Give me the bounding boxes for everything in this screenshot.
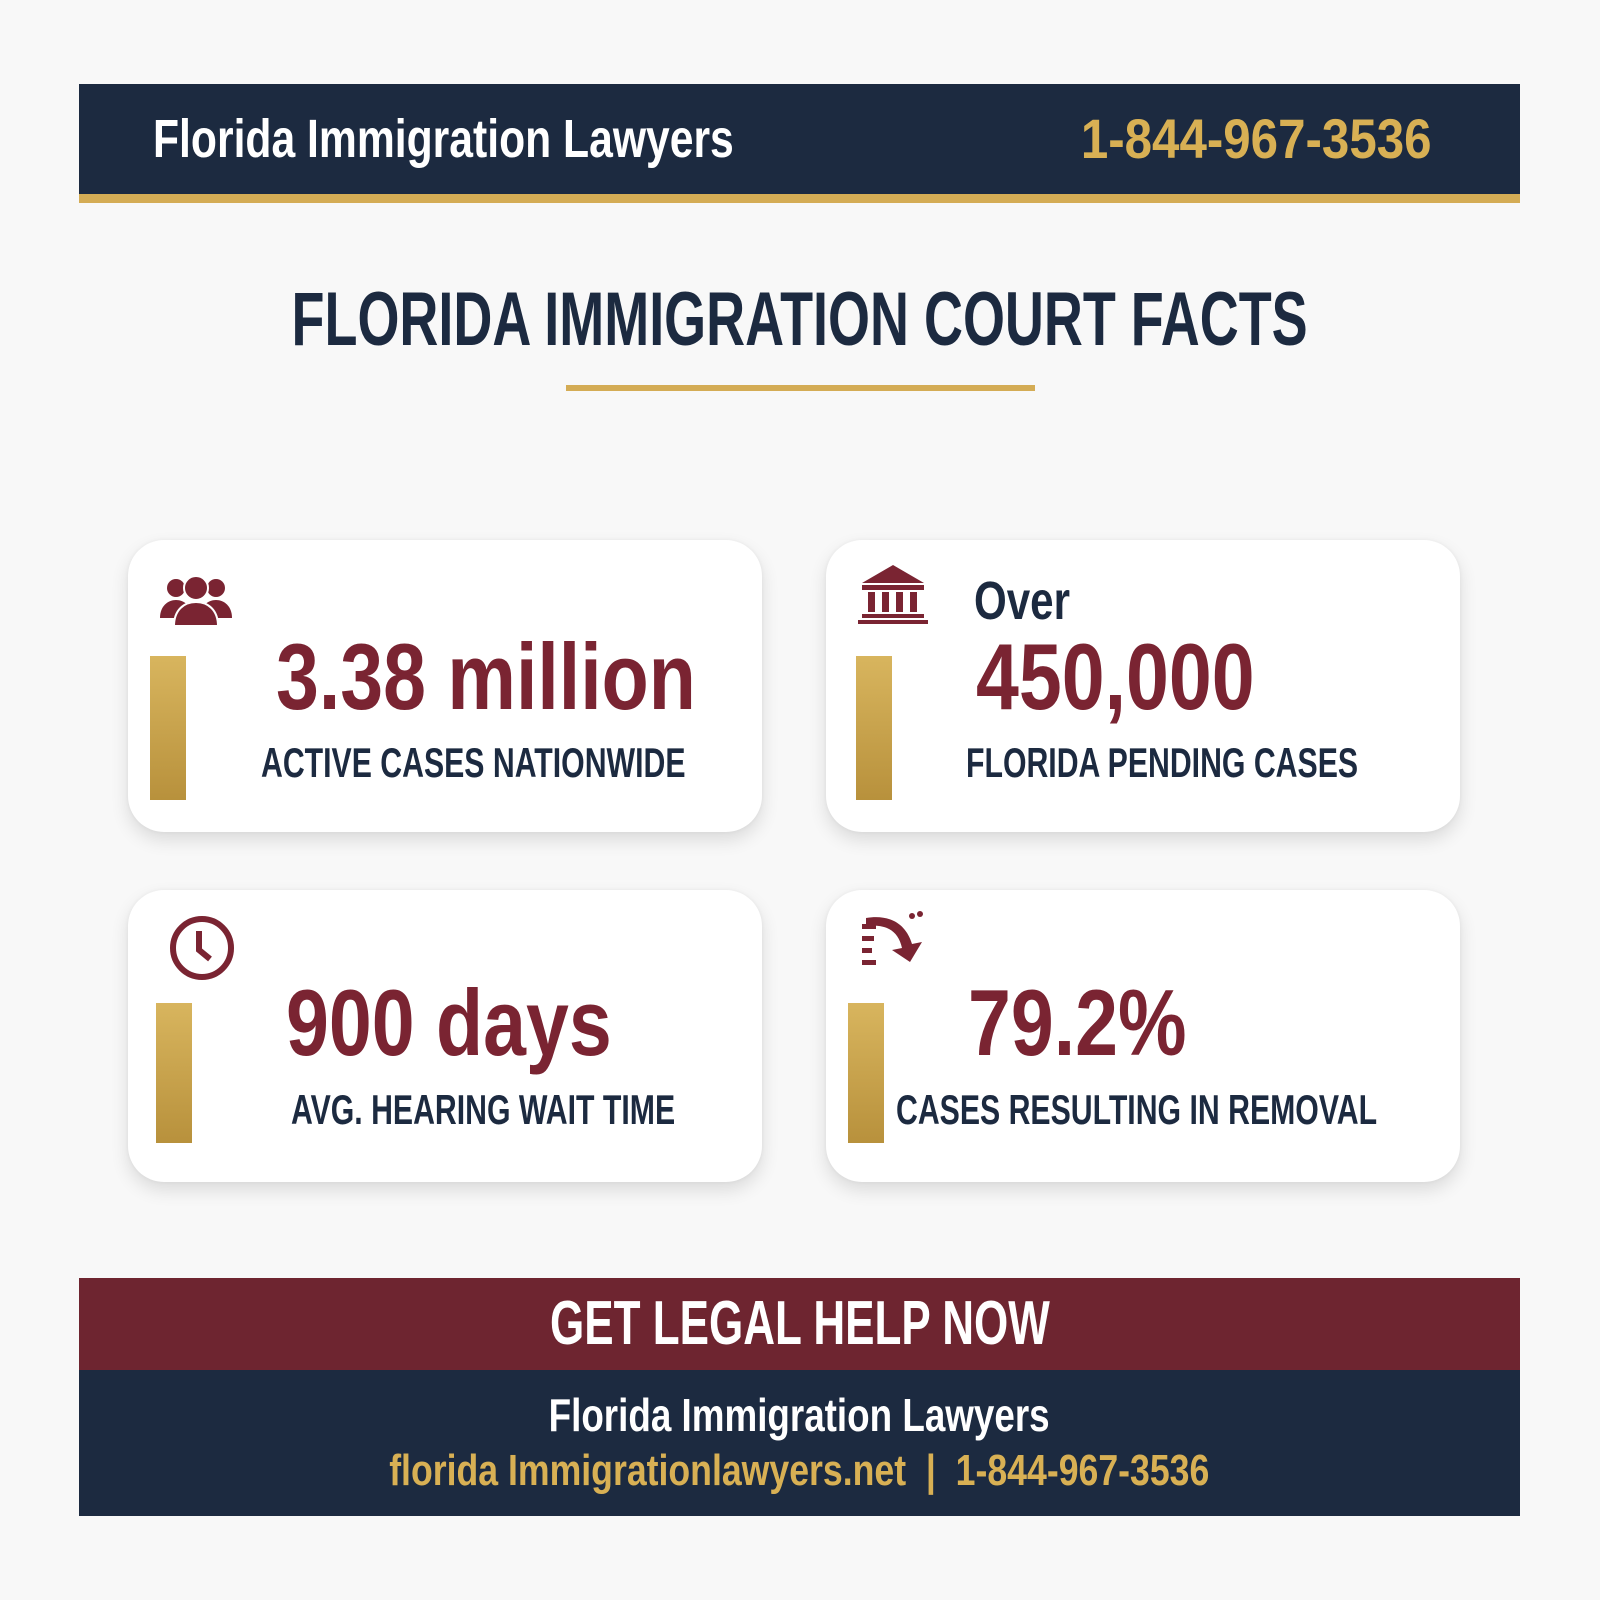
stat label: CASES RESULTING IN REMOVAL <box>896 1086 1377 1133</box>
cta heading: GET LEGAL HELP NOW <box>550 1289 1049 1358</box>
card: active cases <box>128 540 762 832</box>
cta heading <box>79 1278 1520 1370</box>
card: wait time <box>128 890 762 1182</box>
gold bar <box>156 1003 192 1143</box>
cta banner <box>79 1278 1520 1516</box>
stat label: FLORIDA PENDING CASES <box>966 739 1358 786</box>
icon: courthouse <box>858 565 928 624</box>
stat number: 3.38 million <box>276 624 696 729</box>
header phone: 1-844-967-3536 <box>1081 107 1432 170</box>
cta website and phone: florida Immigrationlawyers.net | 1-844-967-3536 <box>389 1446 1210 1495</box>
gold bar <box>848 1003 884 1143</box>
over text: Over <box>974 571 1070 631</box>
card: removal <box>826 890 1460 1182</box>
header bar <box>79 84 1520 203</box>
stat label: AVG. HEARING WAIT TIME <box>291 1086 675 1133</box>
icon: people <box>160 577 232 625</box>
stat number: 450,000 <box>976 624 1255 729</box>
header firm name: Florida Immigration Lawyers <box>153 109 734 169</box>
cta contact block <box>79 1370 1520 1516</box>
gold bar <box>150 656 186 800</box>
title: FLORIDA IMMIGRATION COURT FACTS <box>292 277 1308 362</box>
title underline <box>566 385 1035 391</box>
icon: clock <box>170 916 234 980</box>
gold bar <box>856 656 892 800</box>
cta firm name: Florida Immigration Lawyers <box>549 1389 1050 1441</box>
stat number: 79.2% <box>968 970 1187 1075</box>
card: florida pending <box>826 540 1460 832</box>
stat label: ACTIVE CASES NATIONWIDE <box>261 739 686 786</box>
stat number: 900 days <box>286 970 612 1075</box>
icon: removal arrow <box>862 911 923 965</box>
